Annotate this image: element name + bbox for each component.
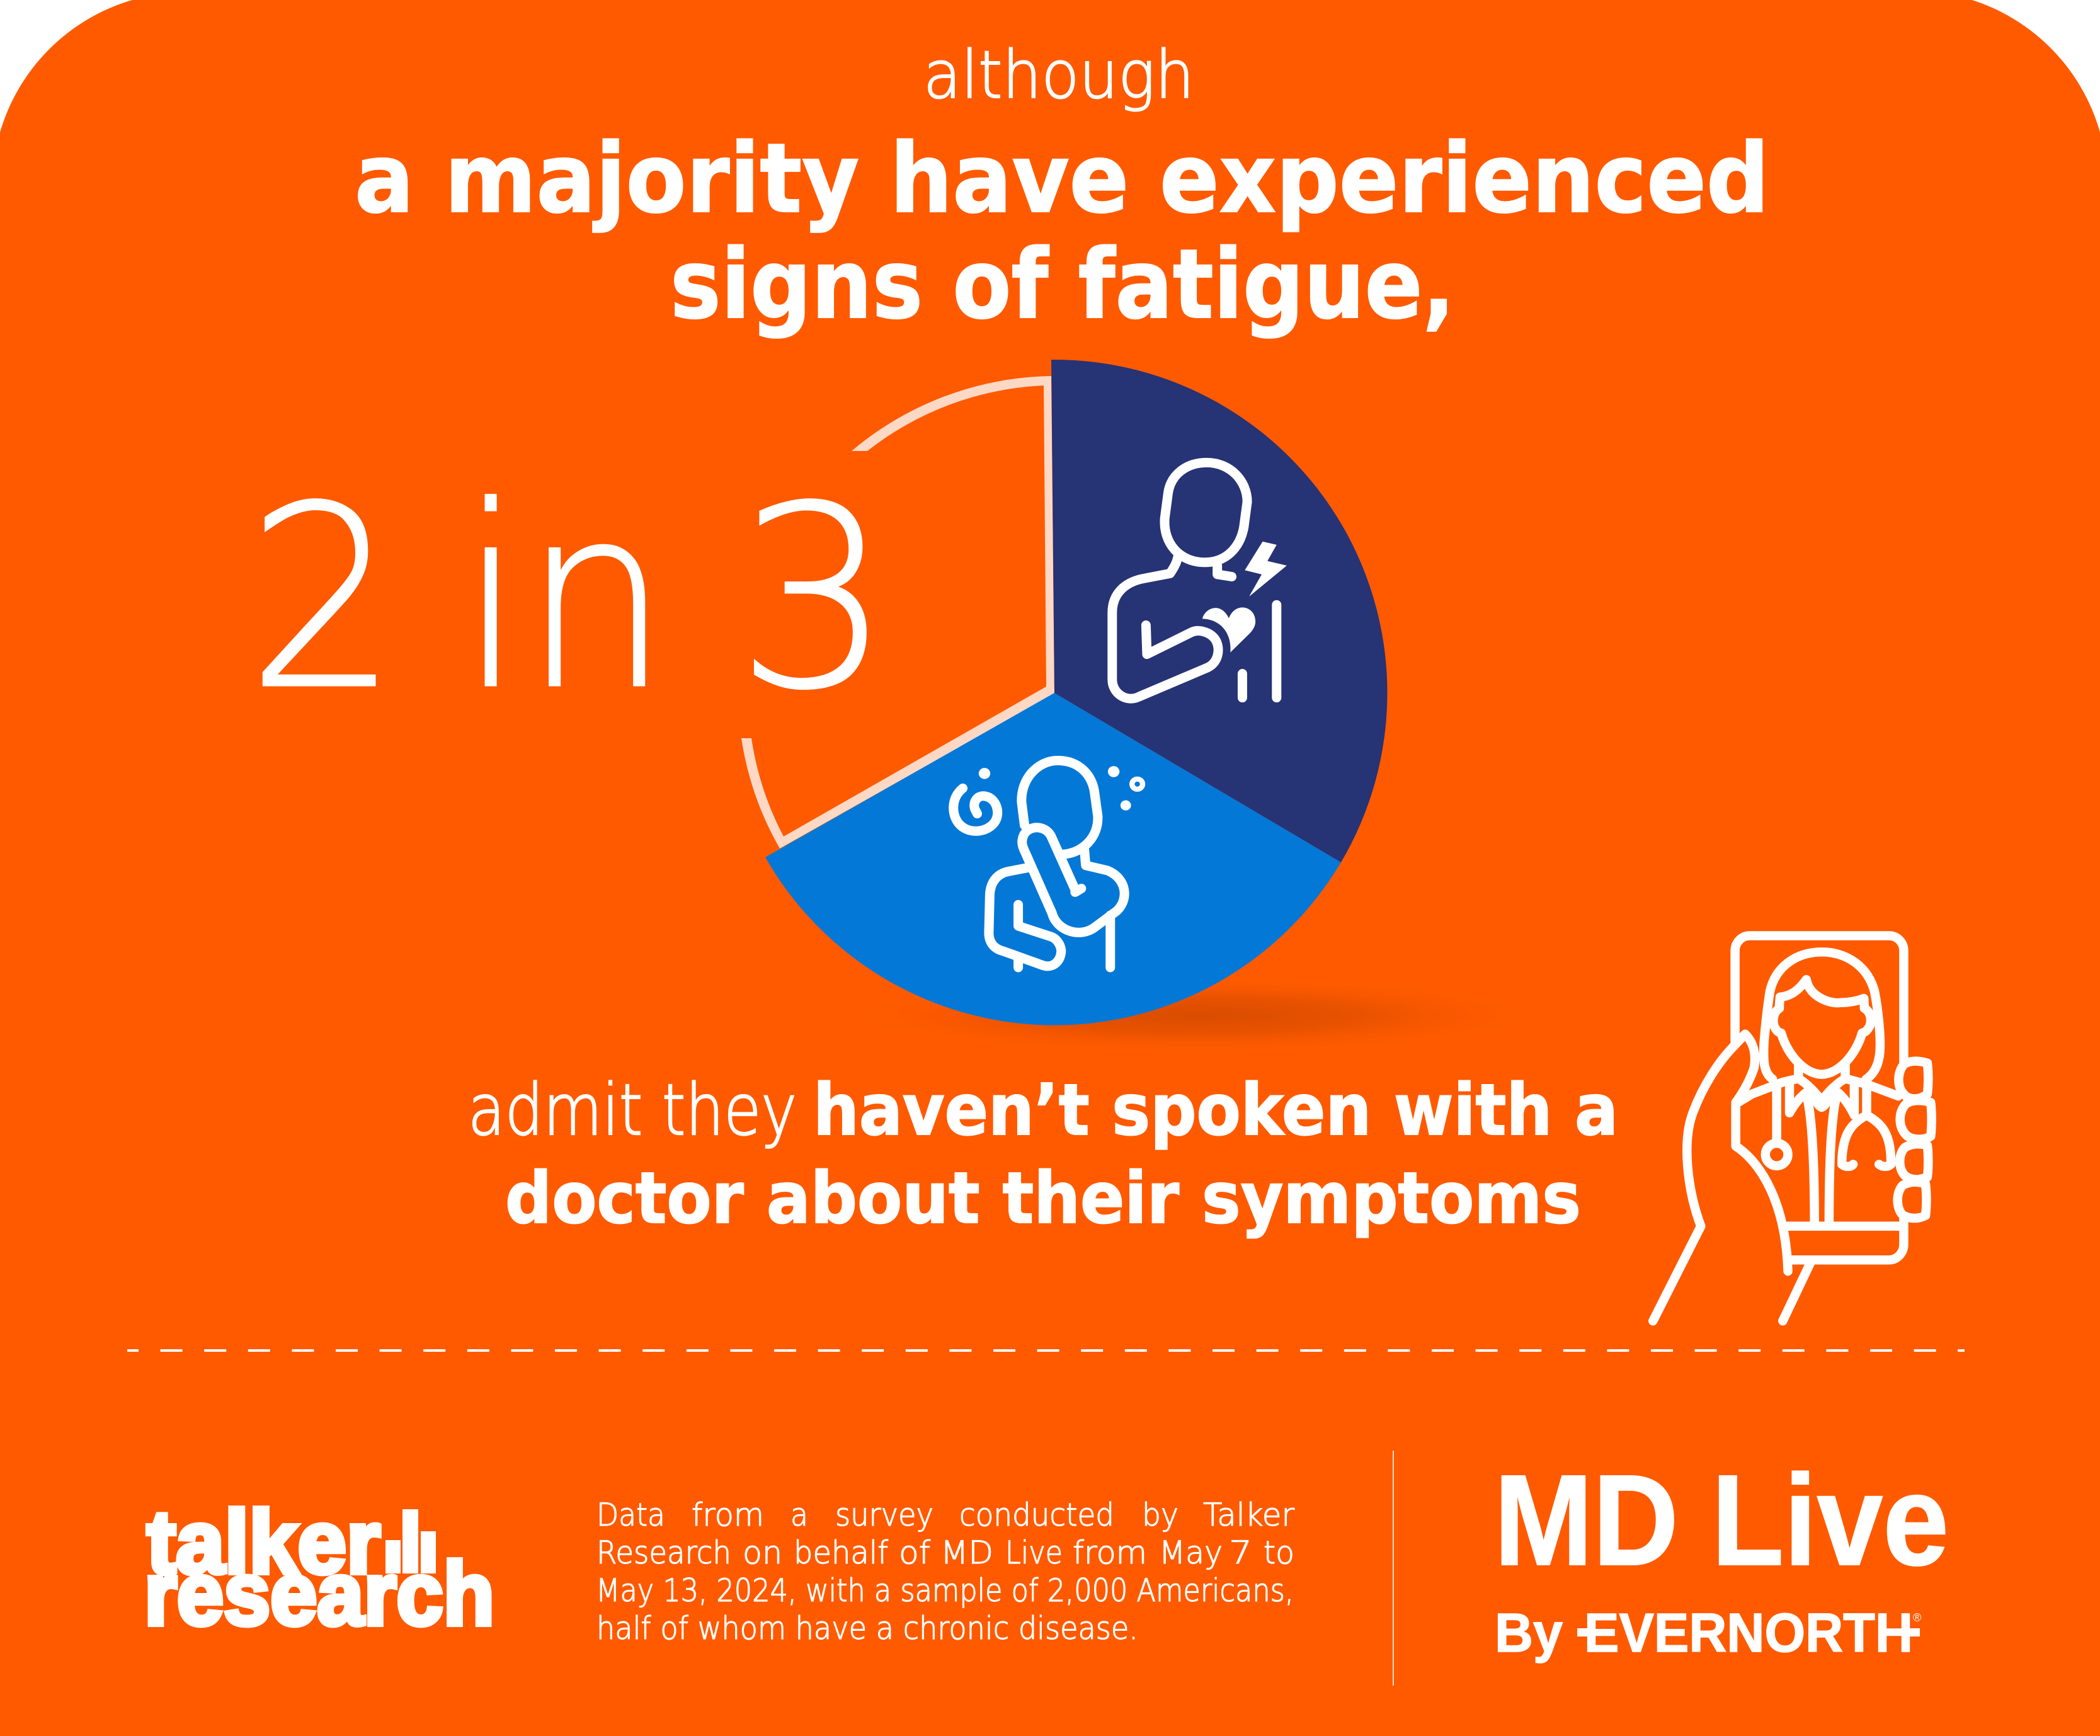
source line 1: Talker	[1203, 1497, 1294, 1533]
source line 2: behalf	[794, 1534, 888, 1571]
caption bold line 2: doctor about their symptoms	[505, 1158, 1581, 1240]
logo word: talker: talker	[147, 1492, 380, 1592]
source line 1: by	[1142, 1497, 1178, 1533]
big statistic	[247, 453, 891, 745]
source line 3: May 13, 2024, with a sample of 2,000 Americans,	[596, 1572, 1294, 1609]
source line 2: from	[1073, 1534, 1147, 1571]
source line 2: on	[743, 1534, 782, 1571]
logo: talker research	[144, 1492, 494, 1644]
source line 2: Research	[596, 1534, 731, 1571]
source line 2	[596, 1534, 1294, 1571]
logo word: research: research	[144, 1544, 494, 1644]
logo word: MD Live: MD Live	[1494, 1448, 1949, 1592]
logo crossbars	[1577, 1628, 1920, 1636]
heading	[355, 37, 1769, 340]
source line 2: May	[1159, 1534, 1223, 1571]
logo word: By: By	[1495, 1602, 1563, 1664]
big statistic: in	[460, 453, 669, 745]
source line 1: conducted	[959, 1497, 1114, 1533]
source line 2: Live	[1005, 1534, 1063, 1571]
logo bars	[385, 1509, 436, 1573]
caption bold line 1: haven’t spoken with a	[813, 1070, 1618, 1151]
source line 2: to	[1264, 1534, 1294, 1571]
big statistic: 3	[736, 453, 891, 745]
headline line 2: signs of fatigue,	[670, 229, 1455, 340]
logo: MD Live By Evernorth	[1494, 1448, 1949, 1664]
headline line 1: a majority have experienced	[355, 123, 1769, 234]
pie slice: blue	[765, 693, 1341, 1025]
pie slice: navy	[1051, 360, 1388, 862]
source line 1: a	[790, 1497, 808, 1533]
registered mark: ®	[1913, 1611, 1921, 1624]
pie slice: outlined remainder	[741, 376, 1054, 848]
logo word: Evernorth: EVERNORTH	[1584, 1602, 1913, 1664]
caption light lead-in: admit they	[468, 1070, 797, 1151]
big statistic: 2	[247, 453, 399, 745]
source line 2: MD	[940, 1534, 993, 1571]
source line 1: from	[692, 1497, 764, 1533]
icon: fatigued person with heart and lightning	[1112, 462, 1287, 699]
survey source note	[596, 1497, 1294, 1647]
pie chart	[741, 360, 1388, 1025]
source line 4: half of whom have a chronic disease.	[596, 1610, 1138, 1647]
intro word: although	[923, 37, 1194, 113]
source line 1: survey	[835, 1497, 933, 1533]
source line 1	[596, 1497, 1294, 1533]
icon: dizzy person holding head	[954, 760, 1143, 968]
source line 2: 7	[1229, 1534, 1252, 1571]
icon: hand holding phone with doctor on screen	[1653, 936, 1932, 1321]
caption	[468, 1070, 1618, 1240]
source line 2: of	[899, 1534, 930, 1571]
pie shadow	[844, 976, 1549, 1054]
source line 1: Data	[596, 1497, 665, 1533]
